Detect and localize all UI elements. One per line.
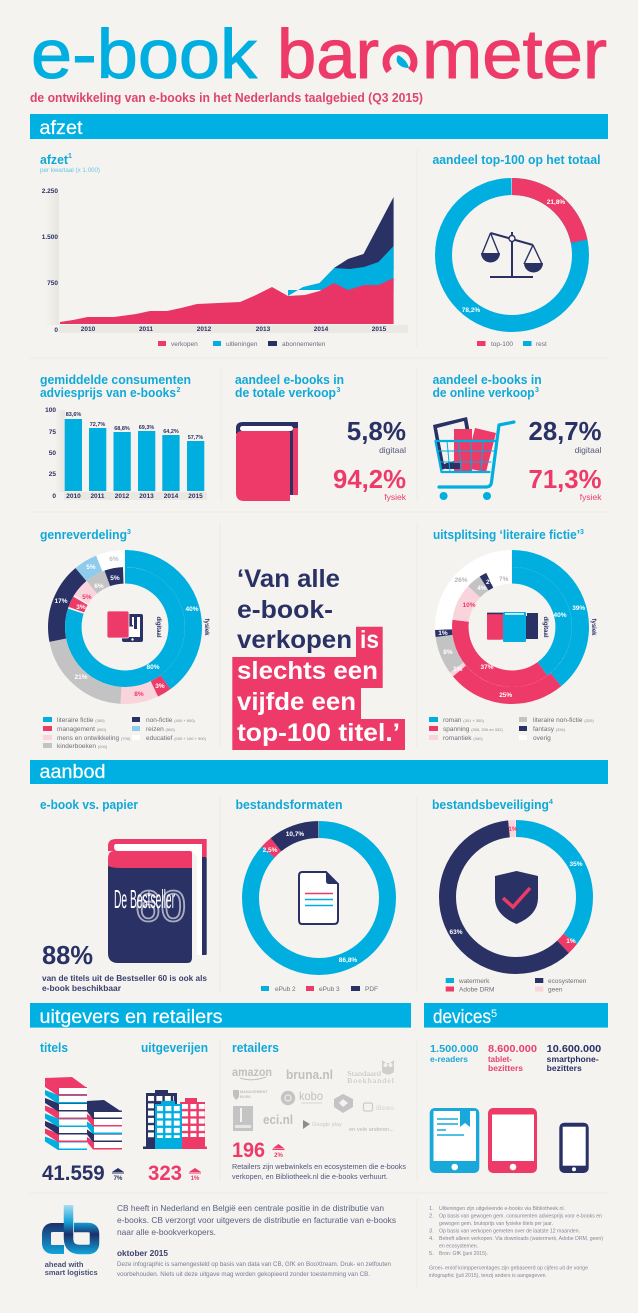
icon: smartphone (559, 1123, 589, 1173)
footer: about CB (117, 1203, 396, 1278)
area: uitleningen (288, 246, 394, 296)
legend: spanning (305, 330 en 332) (443, 726, 503, 733)
donut labels: 7% (499, 576, 509, 583)
title: e-book barometer: meter (422, 15, 607, 93)
heading: genreverdeling (40, 528, 127, 542)
footer: footnotes: Op basis van gewogen gem. consumenten adviesprijs voor e-books en (439, 1214, 602, 1220)
donut: formats (250, 830, 388, 966)
donut: top-100: 78,2% (462, 307, 480, 314)
footer: footnotes: infographic (juli 2015), tenzij anders is aangegeven. (429, 1273, 547, 1279)
footer: about CB: CB heeft in Nederland en België een centrale positie in de distributie van (117, 1203, 384, 1213)
quote callout: slechts een (237, 657, 378, 685)
heading: afzet: 1 (68, 153, 72, 160)
stat: 88%: e-book beschikbaar (42, 984, 121, 993)
icon: tablet (488, 1108, 537, 1173)
stat: 88%: 88% (42, 940, 93, 970)
axes: 0 (52, 493, 56, 500)
section bar: uitgevers en retailers: uitgevers en retailers (40, 1007, 222, 1028)
stat: digitaal: digitaal (575, 445, 602, 455)
legend: romantiek (340) (443, 735, 483, 742)
stat: fysiek: fysiek (384, 492, 407, 502)
stat: 196: 2% (274, 1153, 284, 1159)
text: retailers description: Retailers zijn webwinkels en ecosystemen die e-books (232, 1162, 406, 1171)
donut labels (438, 576, 596, 699)
heading: uitgeverijen (141, 1041, 208, 1055)
footer: footnotes (429, 1206, 603, 1279)
bar values: 57,7% (188, 435, 203, 441)
legend: kinderboeken (200) (57, 743, 108, 750)
donut labels: 25% (499, 692, 512, 699)
quote callout: is (360, 626, 379, 654)
footer: about CB: Deze infographic is samengesteld op basis van data van CB, GfK en BooXtream. Druk- en zetfouten (117, 1261, 392, 1268)
retailer logos: Boekhandel (347, 1076, 395, 1085)
legend: management (650) (57, 726, 107, 733)
footer: footnotes: en ecosystemen. (439, 1244, 478, 1250)
legend: educatief (000 + 100 + 900) (146, 735, 207, 742)
text: retailers description (232, 1162, 406, 1181)
heading: 4 (549, 799, 553, 806)
footer: about CB: voorbehouden. Niets uit deze uitgave mag worden gekopieerd zonder toestemming van CB. (117, 1271, 370, 1278)
donut labels: 80% (146, 664, 160, 671)
heading: gemiddelde consumenten (40, 373, 191, 387)
panel: devices (430, 1043, 601, 1173)
bar values: 72,7% (90, 422, 105, 428)
chart axes: 750 (47, 280, 58, 287)
axes: 2014 (164, 493, 179, 500)
panel: bestandsbeveiliging (432, 798, 587, 994)
footer: footnotes: Op basis van verkopen gemeten over de laatste 12 maanden. (439, 1228, 580, 1234)
donut labels: 26% (454, 577, 468, 584)
heading: aandeel e-books in (235, 373, 344, 387)
stat: tablet-bezitters: bezitters (488, 1064, 524, 1073)
legend (43, 717, 207, 750)
heading: de online verkoop (433, 386, 535, 400)
heading: retailers (232, 1041, 279, 1055)
area: abonnementen (334, 197, 394, 270)
donut labels: 8% (134, 691, 144, 698)
donut: protection: 1% (566, 938, 576, 945)
legend: fantasy (334) (533, 726, 566, 733)
icon: e-reader (430, 1108, 479, 1173)
retailer logos: eci.nl (263, 1113, 293, 1127)
heading: aandeel e-books in (433, 373, 542, 387)
donut: formats: 10,7% (286, 831, 304, 838)
heading: uitsplitsing ‘literaire fictie’ (433, 528, 580, 542)
stat: 41.559: 41.559 (42, 1162, 105, 1185)
legend: roman (301 + 300) (443, 717, 484, 724)
donut: top-100 (444, 186, 580, 324)
footer: about CB: e-books. CB verzorgt voor uitgevers de distributie en facturatie van e-books (117, 1215, 396, 1225)
text: retailers description: verkopen, en Bibliotheek.nl die e-books verhuurt. (232, 1172, 388, 1181)
donut labels: 3% (76, 604, 86, 611)
legend (261, 986, 378, 993)
panel: aandeel top-100 (432, 153, 600, 348)
donut labels: 6% (109, 556, 119, 563)
axes: 50 (49, 450, 56, 457)
donut: protection (448, 826, 584, 966)
chart axes: 2013 (256, 326, 271, 333)
bar values: 69,3% (139, 425, 154, 431)
donut labels: 1% (438, 630, 448, 637)
stat: 323: 1% (191, 1176, 200, 1182)
quote callout: ‘Van alle (237, 565, 340, 593)
legend: ePub 3 (319, 986, 340, 993)
donut labels: 5% (86, 564, 96, 571)
footer: CB logo (45, 1205, 98, 1277)
axes: 2011 (90, 493, 105, 500)
panel: adviesprijs bar chart (40, 373, 207, 500)
chart axes: 2012 (197, 326, 212, 333)
donut labels: 17% (54, 598, 68, 605)
stat: 323 (148, 1162, 201, 1185)
donut labels: 8% (443, 649, 453, 656)
donut labels: 6% (94, 583, 104, 590)
stat: tablet-bezitters: 8.600.000 (488, 1043, 537, 1055)
heading (433, 373, 542, 400)
panel: genreverdeling (40, 528, 209, 750)
chart axes: 2014 (314, 326, 329, 333)
panel: aandeel totale verkoop (235, 373, 407, 502)
legend: reizen (500) (146, 726, 176, 733)
icon: book stacks (45, 1077, 122, 1150)
donut labels: digitaal (155, 616, 161, 638)
heading: bestandsbeveiliging (432, 798, 549, 812)
stat: fysiek: 71,3% (528, 464, 602, 494)
heading: 2 (176, 387, 180, 394)
bar values: 68,8% (114, 426, 130, 432)
donut labels: 5% (110, 575, 120, 582)
panel: aandeel online verkoop (433, 373, 602, 502)
heading (235, 373, 344, 400)
quote callout: verkopen (237, 626, 352, 654)
footer: footnotes: 1. (429, 1206, 434, 1212)
heading: titels (40, 1041, 68, 1055)
panel: titels (40, 1041, 124, 1185)
legend: rest (536, 341, 547, 348)
retailer logos: bruna.nl (286, 1067, 333, 1082)
legend: geen (548, 986, 563, 994)
axes: 75 (49, 429, 56, 436)
panel: uitgeverijen (141, 1041, 208, 1185)
icon: book and tablet (107, 611, 143, 642)
heading: 3 (127, 529, 131, 536)
panel: uitsplitsing literaire fictie (429, 528, 596, 742)
quote callout: vijfde een (237, 688, 356, 716)
donut labels (54, 556, 209, 698)
retailer logos (232, 1060, 395, 1133)
donut labels: 40% (553, 612, 567, 619)
stat: e-readers: e-readers (430, 1055, 469, 1064)
icon: Bestseller book: 60 (135, 882, 186, 931)
donut labels: 40% (185, 606, 199, 613)
retailer logos: Google play (312, 1122, 342, 1128)
icon: Bestseller book (108, 839, 207, 963)
axes: 2015 (188, 493, 203, 500)
heading: 3 (336, 387, 340, 394)
retailer logos: BOEK (240, 1095, 251, 1099)
footer: about CB: oktober 2015 (117, 1249, 169, 1258)
stat: 88% (42, 940, 208, 993)
icon: shopping cart (433, 417, 514, 500)
stat: digitaal: digitaal (379, 445, 406, 455)
donut labels: fysiek (590, 618, 596, 636)
subtitle: de ontwikkeling van e-books in het Nederlands taalgebied (Q3 2015) (30, 90, 423, 105)
heading: afzet (40, 153, 100, 174)
legend: verkopen (171, 341, 198, 348)
icon: red book (236, 422, 298, 501)
retailer logos: amazon (232, 1065, 272, 1079)
footer: footnotes: Betreft alleen verkopen. Via downloads (watermerk, Adobe DRM, geen) (439, 1236, 603, 1242)
donut labels: 21% (74, 674, 88, 681)
heading: aandeel top-100 op het totaal (432, 153, 600, 167)
donut labels: 5% (82, 594, 92, 601)
legend (158, 341, 326, 348)
legend: Adobe DRM (459, 986, 494, 994)
axes: 25 (49, 471, 56, 478)
legend: watermerk (458, 978, 490, 985)
section bar: aanbod: aanbod (40, 762, 106, 783)
retailer logos: en vele anderen... (349, 1127, 394, 1133)
footer: footnotes: Groei- en/of krimppercentages zijn gebaseerd op cijfers uit de vorige (429, 1266, 588, 1272)
heading: afzet: per kwartaal (x 1.000) (40, 167, 100, 174)
donut: formats: 2,5% (263, 847, 278, 854)
stat: 196: 196 (232, 1139, 265, 1162)
stat: smartphone-bezitters: bezitters (547, 1064, 582, 1073)
donut labels: 4% (477, 585, 487, 592)
panel: bestandsformaten (236, 798, 388, 993)
section bar: afzet: afzet (40, 118, 83, 139)
donut labels: 39% (572, 605, 585, 612)
footer: footnotes: Uitleningen zijn uitgeleende e-books via Bibliotheek.nl. (439, 1206, 565, 1212)
stat: 41.559: 7% (114, 1176, 123, 1182)
footer: CB logo: ahead with (45, 1260, 84, 1269)
footer: footnotes: Bron: GfK (juni 2015). (439, 1251, 488, 1257)
heading (40, 373, 191, 400)
stat: smartphone-bezitters: smartphone- (547, 1055, 599, 1064)
title: e-book barometer (31, 15, 607, 93)
legend: literaire fictie (300) (57, 717, 105, 724)
section bar: devices (424, 1003, 608, 1028)
chart axes: 2015 (372, 326, 387, 333)
legend: literaire non-fictie (320) (533, 717, 594, 724)
heading: 3 (580, 529, 584, 536)
retailer logos: MANAGEMENT (240, 1090, 268, 1094)
bar values: 83,6% (66, 412, 81, 418)
heading: afzet: afzet (40, 153, 69, 167)
stat: fysiek: fysiek (580, 492, 602, 502)
icon: scales (481, 232, 543, 277)
icon: Bestseller book: De Bestseller (114, 884, 175, 914)
bar values (66, 412, 203, 441)
donut: fysiek outer ring (56, 558, 194, 696)
donut: fysiek outer ring (444, 558, 580, 696)
legend: top-100 (491, 341, 513, 348)
heading: e-book vs. papier (40, 798, 138, 812)
stat: 323: 323 (148, 1162, 182, 1185)
donut labels: 37% (480, 664, 494, 671)
donut: protection: 35% (569, 861, 583, 868)
heading: 3 (535, 387, 539, 394)
bars (65, 419, 204, 491)
footer: CB logo: smart logistics (45, 1268, 98, 1277)
legend: ecosystemen (548, 978, 587, 985)
panel: afzet area chart (40, 153, 408, 348)
legend: overig (533, 735, 551, 742)
quote callout (232, 565, 405, 750)
footer: about CB: naar alle e-bookverkopers. (117, 1227, 216, 1237)
axes: 2013 (139, 493, 154, 500)
section bar: afzet (30, 114, 608, 139)
footer: footnotes: gewogen gem. brutoprijs van fysieke titels per jaar. (439, 1221, 553, 1227)
donut: digitaal inner ring (73, 575, 177, 679)
footer: footnotes: 3. (429, 1228, 434, 1234)
retailer logos: kobo (299, 1089, 323, 1103)
axes: 100 (45, 407, 56, 414)
axes: 2010 (66, 493, 81, 500)
legend: uitleningen (226, 341, 258, 348)
legend: mens en ontwikkeling (700) (57, 735, 131, 742)
donut: protection: 1% (508, 826, 518, 833)
stat: digitaal: 28,7% (528, 416, 602, 446)
donut labels: fysiek (203, 618, 209, 636)
quote callout: e-book- (237, 596, 333, 624)
chart axes: 2010 (81, 326, 96, 333)
area: verkopen (60, 278, 394, 324)
legend: PDF (365, 986, 378, 993)
legend (429, 717, 594, 742)
heading: bestandsformaten (236, 798, 342, 812)
donut: protection: 63% (449, 929, 463, 936)
stat: 88%: van de titels uit de Bestseller 60 is ook als (42, 974, 208, 983)
legend (446, 978, 587, 994)
donut labels: digitaal (542, 616, 548, 638)
panel: retailers (232, 1041, 406, 1181)
icon: shield (495, 871, 538, 924)
chart axes: 0 (54, 327, 58, 334)
legend: non-fictie (400 + 600) (146, 717, 195, 724)
donut: digitaal inner ring (460, 575, 564, 679)
stat: digitaal: 5,8% (347, 416, 406, 446)
donut labels: 10% (462, 602, 476, 609)
quote callout: top-100 titel.’ (237, 719, 400, 747)
chart axes: 2011 (139, 326, 153, 333)
footer: footnotes: 2. (429, 1214, 434, 1220)
retailer logos: iBooks (376, 1106, 394, 1112)
stat: smartphone-bezitters (547, 1043, 601, 1073)
section bar: devices: 5 (491, 1008, 497, 1020)
section bar: aanbod (30, 760, 608, 784)
axes: 2012 (115, 493, 130, 500)
stat: smartphone-bezitters: 10.600.000 (547, 1043, 601, 1055)
section bar: uitgevers en retailers (30, 1003, 411, 1028)
chart axes: 2.250 (42, 188, 58, 195)
chart axes (42, 188, 408, 334)
donut labels: 3% (155, 683, 165, 690)
donut: top-100: 21,8% (547, 199, 565, 206)
legend (477, 341, 547, 348)
donut: formats: 86,8% (339, 957, 357, 964)
heading: adviesprijs van e-books (40, 386, 176, 400)
heading: de totale verkoop (235, 386, 336, 400)
icon: three books (487, 612, 538, 642)
stat: tablet-bezitters (488, 1043, 537, 1073)
legend: ePub 2 (275, 986, 296, 993)
title: e-book barometer: e-book (31, 15, 258, 93)
stat: e-readers (430, 1043, 479, 1064)
retailer logos: Standaard (347, 1069, 381, 1078)
panel: e-book vs. papier (40, 798, 208, 993)
donut labels: 2% (486, 579, 496, 586)
icon: file (299, 872, 338, 924)
axes (45, 407, 207, 500)
stat: e-readers: 1.500.000 (430, 1043, 479, 1055)
title: e-book barometer: bar (277, 15, 379, 93)
legend: abonnementen (282, 341, 326, 348)
stat: fysiek: 94,2% (333, 464, 406, 494)
footer: footnotes: 4. (429, 1236, 434, 1242)
donut labels: 1% (453, 666, 463, 673)
icon: buildings (143, 1090, 207, 1149)
stat: tablet-bezitters: tablet- (488, 1055, 512, 1064)
footer: footnotes: 5. (429, 1251, 434, 1257)
bar values: 64,2% (163, 429, 179, 435)
stat: 196 (232, 1139, 284, 1162)
section bar: devices: devices (433, 1007, 491, 1028)
chart axes: 1.500 (42, 234, 58, 241)
